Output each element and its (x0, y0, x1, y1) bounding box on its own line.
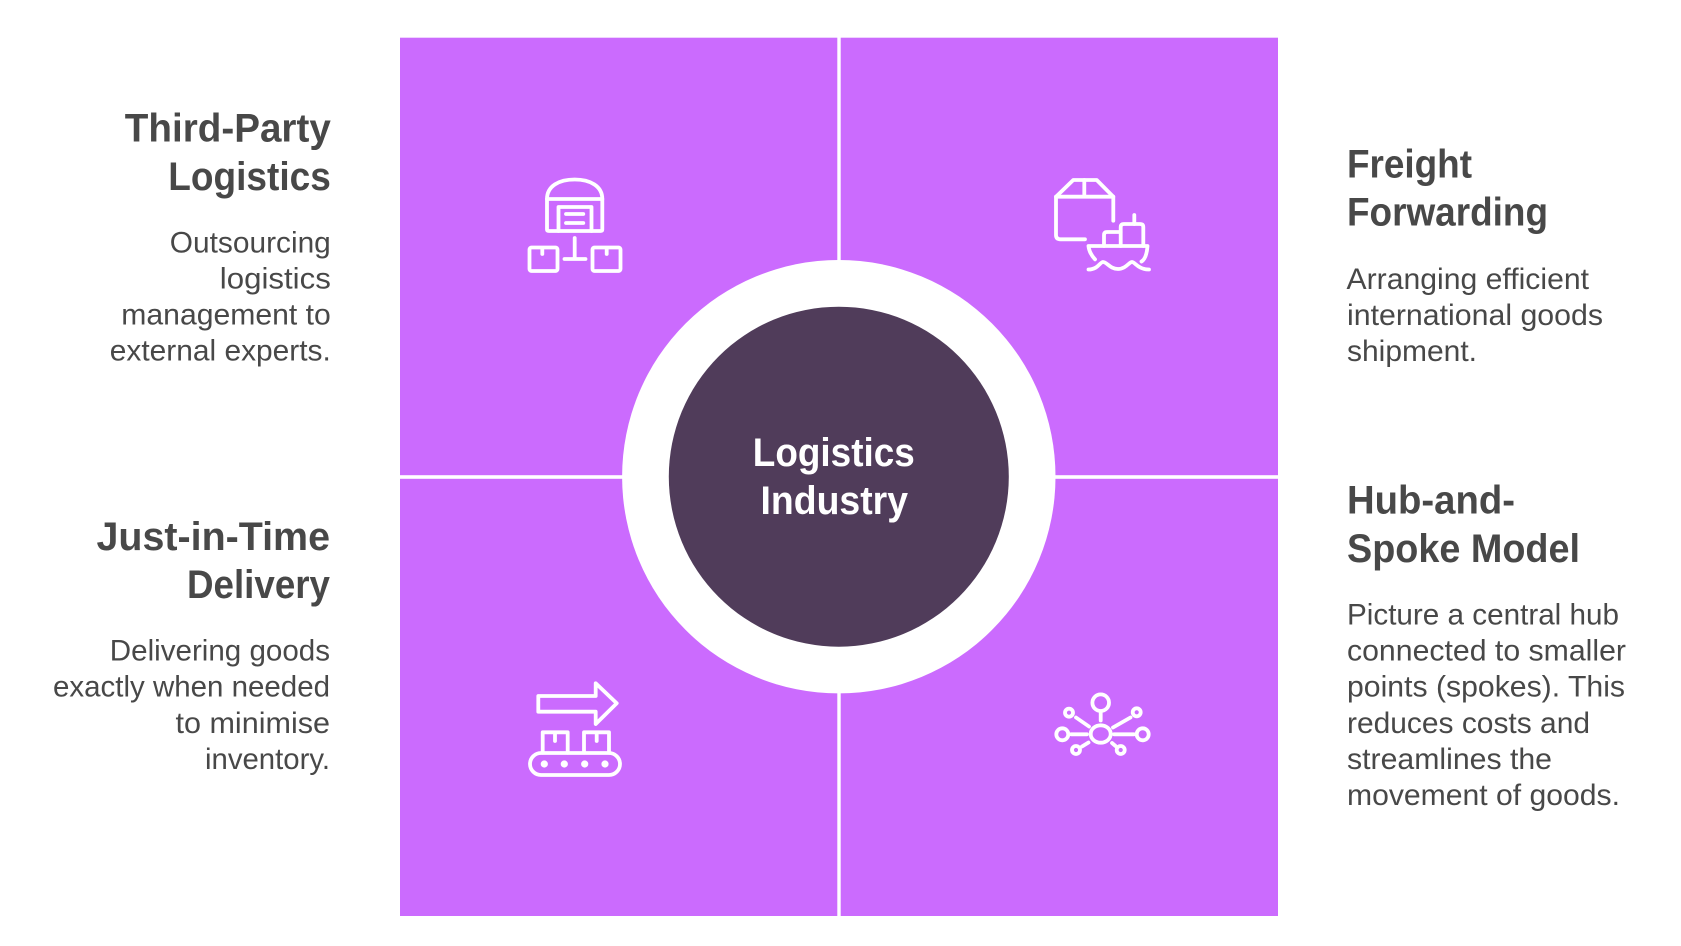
heading: Just-in-Time Delivery (96, 515, 331, 607)
heading: Freight Forwarding: Forwarding (1347, 191, 1548, 235)
hub label: Logistics (753, 431, 915, 475)
description: Hub-and-Spoke Model: points (spokes). This (1347, 670, 1625, 704)
description: Just-in-Time Delivery: exactly when needed (53, 671, 330, 704)
heading: Third-Party Logistics: Third-Party (125, 107, 332, 151)
panel: bottom-right quadrant (841, 479, 1278, 916)
description: Third-Party Logistics: external experts. (110, 335, 331, 368)
hub label: Industry (760, 479, 909, 523)
text block: Hub-and-Spoke Model (1347, 478, 1626, 812)
description: Hub-and-Spoke Model: streamlines the (1347, 743, 1552, 776)
description: Hub-and-Spoke Model (1347, 598, 1626, 812)
description: Hub-and-Spoke Model: movement of goods. (1347, 779, 1620, 812)
icon: arrow over conveyor belt (530, 683, 620, 775)
description: Freight Forwarding: Arranging efficient (1346, 263, 1589, 296)
panel: top-right quadrant (841, 38, 1278, 475)
heading: Third-Party Logistics (125, 107, 332, 199)
text block: Freight Forwarding (1346, 143, 1603, 368)
icon: parcel and cargo ship (1056, 180, 1149, 270)
white ring around hub (622, 260, 1056, 693)
heading: Freight Forwarding (1347, 143, 1548, 235)
heading: Just-in-Time Delivery: Just-in-Time (96, 515, 330, 559)
description: Just-in-Time Delivery: to minimise (176, 707, 330, 740)
description: Just-in-Time Delivery (53, 635, 330, 776)
icon: hub and spoke network (1056, 694, 1149, 754)
heading: Hub-and-Spoke Model: Hub-and- (1347, 478, 1515, 522)
description: Hub-and-Spoke Model: connected to smaller (1347, 634, 1626, 667)
description: Third-Party Logistics: logistics (220, 262, 331, 296)
description: Freight Forwarding: shipment. (1347, 335, 1477, 368)
heading: Third-Party Logistics: Logistics (168, 155, 331, 199)
description: Freight Forwarding: international goods (1347, 299, 1603, 332)
heading: Hub-and-Spoke Model (1347, 478, 1580, 571)
icon: warehouse with boxes (530, 180, 620, 271)
central hub (669, 307, 1009, 647)
description: Third-Party Logistics (110, 226, 331, 368)
text block: Third-Party Logistics (110, 107, 332, 368)
heading: Hub-and-Spoke Model: Spoke Model (1347, 527, 1580, 571)
description: Freight Forwarding (1346, 263, 1603, 368)
heading: Freight Forwarding: Freight (1347, 143, 1472, 187)
text block: Just-in-Time Delivery (53, 515, 331, 776)
description: Just-in-Time Delivery: inventory. (205, 743, 330, 776)
description: Hub-and-Spoke Model: Picture a central hub (1347, 598, 1619, 631)
description: Hub-and-Spoke Model: reduces costs and (1347, 707, 1590, 740)
panel: bottom-left quadrant (400, 479, 837, 916)
description: Just-in-Time Delivery: Delivering goods (110, 635, 330, 668)
description: Third-Party Logistics: management to (121, 299, 331, 332)
hub label (753, 431, 915, 523)
panel: top-left quadrant (400, 38, 837, 475)
heading: Just-in-Time Delivery: Delivery (187, 563, 331, 607)
description: Third-Party Logistics: Outsourcing (170, 226, 331, 260)
